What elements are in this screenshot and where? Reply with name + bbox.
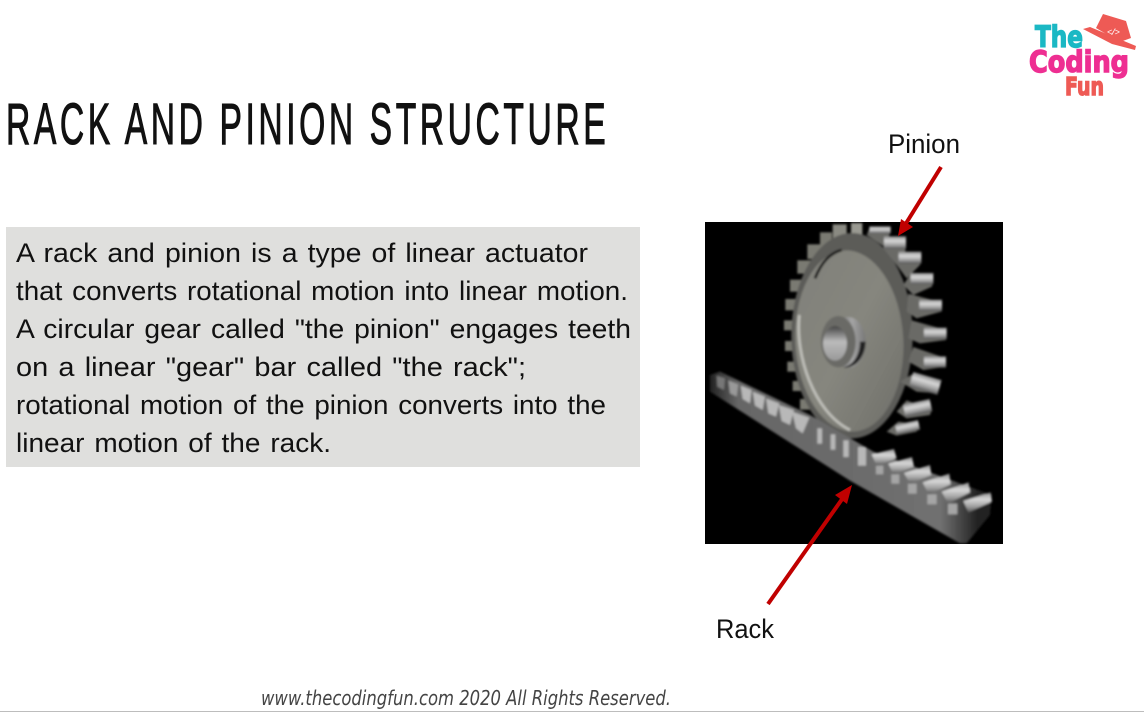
text block: description: linear motion of the rack. <box>16 428 331 458</box>
gear disc <box>791 248 908 434</box>
arrow: pinion <box>898 167 941 236</box>
label: pinion: Pinion <box>888 129 960 159</box>
text block: description: A rack and pinion is a type of linear actuator <box>16 238 588 268</box>
right large teeth <box>867 227 946 436</box>
disc highlight <box>799 315 850 430</box>
logo: wordmark <box>1029 20 1129 101</box>
logo: hat: </> <box>1107 28 1120 38</box>
panel: description <box>6 227 640 467</box>
text block: description: rotational motion of the pinion converts into the <box>16 390 606 420</box>
logo: wordmark: The <box>1035 20 1083 54</box>
logo: wordmark: Fun <box>1065 72 1104 101</box>
gear rim <box>791 233 913 438</box>
title: RACK AND PINION STRUCTURE <box>6 93 606 157</box>
logo: wordmark: Coding <box>1029 45 1129 79</box>
rack body <box>710 372 992 543</box>
text block: description: A circular gear called "the pinion" engages teeth <box>16 314 631 344</box>
text block: description: on a linear "gear" bar called "the rack"; <box>16 352 526 382</box>
rack tooth stems <box>876 466 957 514</box>
rack teeth <box>717 376 866 466</box>
footer: www.thecodingfun.com 2020 All Rights Reserved. <box>261 686 671 710</box>
logo: The Coding Fun <box>1029 14 1136 101</box>
label: rack: Rack <box>716 614 774 644</box>
rack teeth foreground <box>872 449 992 512</box>
left and top small teeth <box>784 223 862 410</box>
text block: description: that converts rotational motion into linear motion. <box>16 276 628 306</box>
hub <box>845 316 862 368</box>
arrow: rack <box>768 485 852 604</box>
text block: description <box>16 238 631 458</box>
image: rack and pinion gear <box>705 222 1003 544</box>
